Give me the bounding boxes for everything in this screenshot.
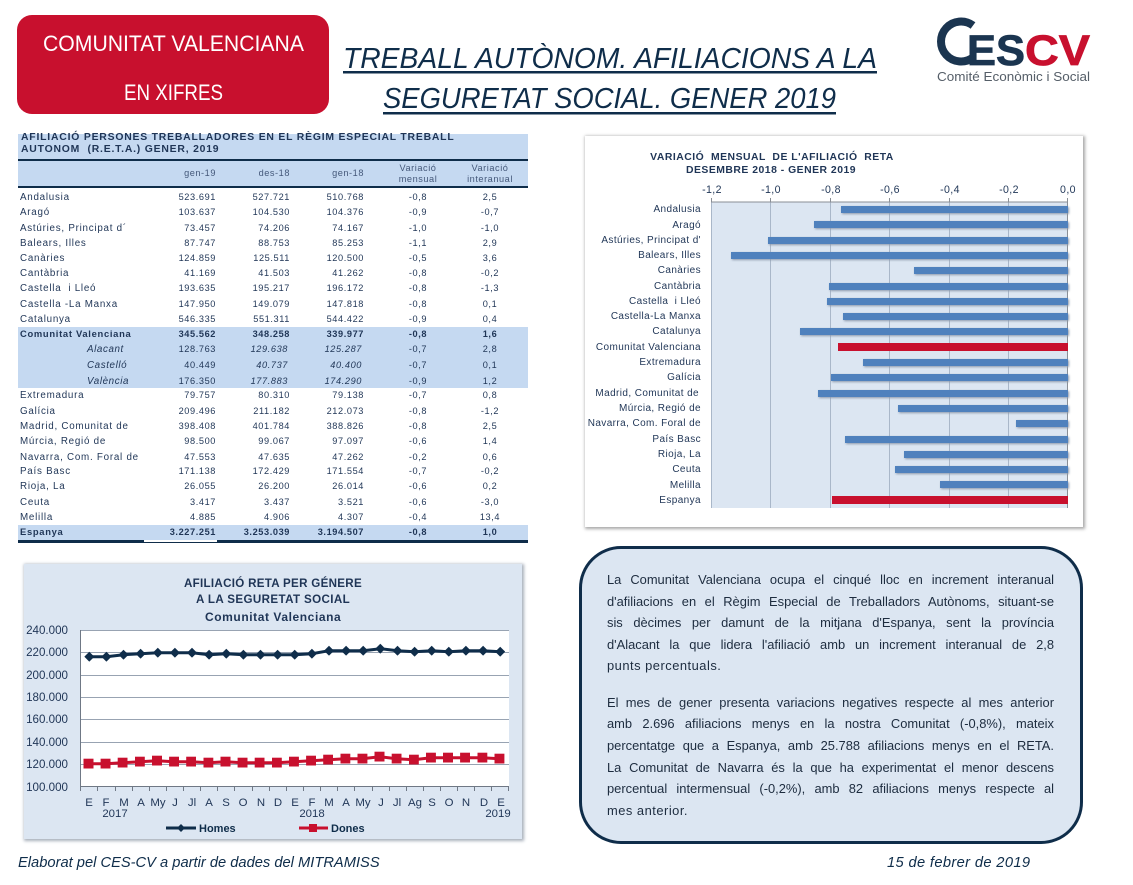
title: TREBALL AUTÒNOM. AFILIACIONS A LA <box>343 42 877 75</box>
table rows: 401.784 <box>253 421 290 431</box>
table rows: -1,0 <box>409 223 427 233</box>
table rows: 193.635 <box>179 283 216 293</box>
bars <box>731 206 1068 488</box>
y axis labels: 220.000 <box>26 646 68 659</box>
table rows: -0,8 <box>409 406 427 416</box>
table heading: AFILIACIÓ PERSONES TREBALLADORES EN EL RÈGIM ESPECIAL TREBALL <box>21 132 454 143</box>
table rows: 41.169 <box>184 268 216 278</box>
x axis labels: -0,4 <box>940 184 960 196</box>
table rows: 345.562 <box>179 329 216 339</box>
table rows: 3.417 <box>190 497 216 507</box>
region labels: Navarra, Com. Foral de <box>588 418 701 429</box>
table rows: 398.408 <box>179 421 216 431</box>
table rows: 147.950 <box>179 299 216 309</box>
table rows: 527.721 <box>253 192 290 202</box>
legend: Dones <box>331 823 365 835</box>
x axis labels: M <box>119 797 129 809</box>
y axis labels: 240.000 <box>26 624 68 637</box>
table rows: 88.753 <box>258 238 290 248</box>
paragraph 2: percentatge que a Espanya, amb 25.788 afiliacions menys en el RETA. <box>607 738 1054 753</box>
x axis labels: F <box>103 797 110 809</box>
table rows: 3.194.507 <box>318 527 364 537</box>
table rows: 2,5 <box>483 192 497 202</box>
table rows: Múrcia, Regió de <box>20 436 106 447</box>
table rows: -0,7 <box>409 466 427 476</box>
header badge: Comunitat Valenciana en xifres: COMUNITAT VALENCIANA <box>43 31 304 56</box>
table rows: 2,9 <box>483 238 497 248</box>
x axis labels: A <box>205 797 213 809</box>
table rows: -0,9 <box>409 376 427 386</box>
table rows: 74.167 <box>332 223 364 233</box>
paragraph 2 <box>607 695 1054 818</box>
line: Dones <box>88 757 499 764</box>
region labels: Madrid, Comunitat de <box>595 388 699 399</box>
table rows: 510.768 <box>327 192 364 202</box>
footer: date: 15 de febrer de 2019 <box>887 855 1030 871</box>
table rows: Andalusia <box>20 192 70 203</box>
table rows: 348.258 <box>253 329 290 339</box>
region labels: Comunitat Valenciana <box>596 342 701 353</box>
table rows: Espanya <box>20 526 63 537</box>
table rows: 98.500 <box>184 436 216 446</box>
region labels: Balears, Illes <box>638 250 701 261</box>
table rows: 26.055 <box>184 481 216 491</box>
table rows: 120.500 <box>327 253 364 263</box>
table rows: 41.262 <box>332 268 364 278</box>
table rows: -0,2 <box>409 452 427 462</box>
table rows: 177.883 <box>251 376 288 386</box>
table rows: Balears, Illes <box>20 238 87 249</box>
table rows: 125.287 <box>325 344 362 354</box>
chart title <box>184 577 362 624</box>
title <box>343 42 877 115</box>
title: SEGURETAT SOCIAL. GENER 2019 <box>383 83 836 115</box>
table rows: 1,4 <box>483 436 497 446</box>
table rows: 80.310 <box>258 390 290 400</box>
y axis labels: 120.000 <box>26 758 68 771</box>
x axis labels: -0,8 <box>821 184 841 196</box>
table rows: -0,2 <box>481 268 499 278</box>
table rows: 339.977 <box>327 329 364 339</box>
x axis labels <box>85 797 511 820</box>
table rows: -0,5 <box>409 253 427 263</box>
table column headers: gen-19 <box>184 168 216 178</box>
table rows: Canàries <box>20 253 65 264</box>
table rows: 174.290 <box>325 376 362 386</box>
table rows: 546.335 <box>179 314 216 324</box>
panel: monthly variation bar chart <box>585 136 1083 527</box>
table rows: 544.422 <box>327 314 364 324</box>
paragraph 1: d'Alacant la que lidera l'afiliació amb un increment interanual de 2,8 <box>607 637 1054 652</box>
region labels: Castella i Lleó <box>629 296 701 307</box>
table rows: 104.530 <box>253 207 290 217</box>
table rows: -1,2 <box>481 406 499 416</box>
table rows: 74.206 <box>258 223 290 233</box>
table rows: Rioja, La <box>20 481 65 492</box>
table rows: 147.818 <box>327 299 364 309</box>
table rows: Astúries, Principat d´ <box>20 223 127 234</box>
table rows: -0,2 <box>481 466 499 476</box>
table rows: 97.097 <box>332 436 364 446</box>
table rows: -1,3 <box>481 283 499 293</box>
x axis labels: S <box>428 797 436 809</box>
x axis labels: E <box>497 797 505 809</box>
table rows: 4.307 <box>338 512 364 522</box>
table rows: 523.691 <box>179 192 216 202</box>
table rows: 3.227.251 <box>170 527 216 537</box>
region labels: Canàries <box>658 265 701 276</box>
paragraph 1 <box>607 572 1054 673</box>
table rows: Ceuta <box>20 497 50 508</box>
highlighted bars: Comunitat Valenciana and Espanya <box>832 343 1068 504</box>
table rows: 0,8 <box>483 390 497 400</box>
paragraph 1: sis dècimes per damunt de la mitjana d'Espanya, sent la província <box>607 615 1054 630</box>
y axis labels: 200.000 <box>26 669 68 682</box>
chart title: Comunitat Valenciana <box>205 610 341 624</box>
region labels: Catalunya <box>652 326 701 337</box>
x axis labels: O <box>445 797 454 809</box>
x axis labels: Jl <box>188 797 196 809</box>
table rows: 79.138 <box>332 390 364 400</box>
table rows: 47.262 <box>332 452 364 462</box>
x axis labels: 2019 <box>485 808 511 820</box>
table column headers: gen-18 <box>332 168 364 178</box>
table column headers: des-18 <box>259 168 290 178</box>
table rows: Navarra, Com. Foral de <box>20 452 139 463</box>
table rows: 99.067 <box>258 436 290 446</box>
table rows: -0,8 <box>409 527 427 537</box>
table rows: 128.763 <box>179 344 216 354</box>
table rows: -0,8 <box>409 192 427 202</box>
paragraph 2: La Comunitat de Navarra és la que ha experimentat el menor descens <box>607 760 1054 775</box>
table rows: 388.826 <box>327 421 364 431</box>
region labels: Rioja, La <box>658 449 701 460</box>
highlighted band: Espanya <box>18 525 528 540</box>
panel: commentary text box <box>579 546 1083 844</box>
table rows: 149.079 <box>253 299 290 309</box>
x axis labels: -1,2 <box>702 184 722 196</box>
table heading <box>18 134 528 159</box>
table rows: -0,8 <box>409 299 427 309</box>
x axis labels: Jl <box>393 797 401 809</box>
footer: source: Elaborat pel CES-CV a partir de dades del MITRAMISS <box>18 855 380 871</box>
x axis labels: My <box>355 797 371 809</box>
region labels: Múrcia, Regió de <box>619 403 701 414</box>
x axis labels: E <box>291 797 299 809</box>
table rows: 47.635 <box>258 452 290 462</box>
table rows: -0,7 <box>409 344 427 354</box>
y axis labels: 140.000 <box>26 736 68 749</box>
table rows: 87.747 <box>184 238 216 248</box>
x axis labels: 0,0 <box>1060 184 1076 196</box>
x axis labels: N <box>257 797 265 809</box>
table rows: Cantàbria <box>20 268 69 279</box>
chart title: DESEMBRE 2018 - GENER 2019 <box>686 165 856 176</box>
x axis labels: S <box>222 797 230 809</box>
table rows: 0,2 <box>483 481 497 491</box>
table rows: -0,6 <box>409 436 427 446</box>
logo: CES-CV <box>937 18 1090 84</box>
paragraph 2: El mes de gener presenta variacions negatives respecte al mes anterior <box>607 695 1054 710</box>
paragraph 1: punts percentuals. <box>607 658 721 673</box>
table rows: 209.496 <box>179 406 216 416</box>
x axis labels: N <box>462 797 470 809</box>
table rows: Castella i Lleó <box>20 283 96 294</box>
region labels: Cantàbria <box>654 281 701 292</box>
x axis labels: O <box>239 797 248 809</box>
x axis labels: D <box>480 797 488 809</box>
table rows: Comunitat Valenciana <box>20 328 131 339</box>
chart title: VARIACIÓ MENSUAL DE L'AFILIACIÓ RETA <box>650 150 894 163</box>
table rows: 104.376 <box>327 207 364 217</box>
table rows: 3.521 <box>338 497 364 507</box>
region labels: Andalusia <box>653 204 701 215</box>
x axis labels: F <box>309 797 316 809</box>
x axis labels: -0,6 <box>880 184 900 196</box>
table rows: 172.429 <box>253 466 290 476</box>
table rows: -0,8 <box>409 329 427 339</box>
table rows: 3.253.039 <box>244 527 290 537</box>
table rows: -0,8 <box>409 283 427 293</box>
table rows: -0,4 <box>409 512 427 522</box>
table rows: -3,0 <box>481 497 499 507</box>
table column headers: interanual <box>467 174 513 184</box>
table rows: Castelló <box>87 360 127 371</box>
chart title: AFILIACIÓ RETA PER GÉNERE <box>184 577 362 590</box>
paragraph 2: amb 2.696 afiliacions menys en la nostra Comunitat (-0,8%), mateix <box>607 716 1054 731</box>
table rows: 40.400 <box>330 360 362 370</box>
table rows: 0,1 <box>483 299 497 309</box>
table rows: 2,8 <box>483 344 497 354</box>
paragraph 1: d'afiliacions en el Règim Especial de Treballadors Autònoms, situant-se <box>607 594 1054 609</box>
region labels: Melilla <box>670 480 701 491</box>
logo: CES-CV: ES <box>967 27 1025 75</box>
region labels: País Basc <box>652 434 701 445</box>
table rows: Castella -La Manxa <box>20 299 118 310</box>
x axis labels: -0,2 <box>999 184 1019 196</box>
table rows: 40.449 <box>184 360 216 370</box>
region labels: Extremadura <box>639 357 701 368</box>
table rows: -1,0 <box>481 223 499 233</box>
table rows: Aragó <box>20 207 50 218</box>
table column headers <box>18 161 528 186</box>
table rows: 3,6 <box>483 253 497 263</box>
region labels: Castella-La Manxa <box>611 311 701 322</box>
region labels: Aragó <box>672 220 701 231</box>
x axis labels: M <box>324 797 334 809</box>
table rows: 26.014 <box>332 481 364 491</box>
x axis labels: D <box>274 797 282 809</box>
logo: CES-CV: CV <box>1025 27 1090 75</box>
table rows: 40.737 <box>256 360 288 370</box>
table rows: 4.906 <box>264 512 290 522</box>
table rows: 47.553 <box>184 452 216 462</box>
table rows: 85.253 <box>332 238 364 248</box>
paragraph 1: La Comunitat Valenciana ocupa el cinqué lloc en increment interanual <box>607 572 1054 587</box>
table rows: 211.182 <box>253 406 290 416</box>
table column headers: Variació <box>472 163 508 173</box>
table rows: 26.200 <box>258 481 290 491</box>
table rows: -0,6 <box>409 497 427 507</box>
table rows: 551.311 <box>253 314 290 324</box>
chart title <box>650 150 894 176</box>
region labels: Astúries, Principat d' <box>601 235 701 246</box>
table rows: 13,4 <box>480 512 500 522</box>
table rows: Galícia <box>20 406 56 417</box>
table rows: Melilla <box>20 512 53 523</box>
table rows: -0,6 <box>409 481 427 491</box>
table rows: València <box>87 376 129 387</box>
x axis labels: A <box>137 797 145 809</box>
table rows: 0,4 <box>483 314 497 324</box>
region labels: Ceuta <box>672 464 701 475</box>
region labels: Espanya <box>659 495 701 506</box>
table rows: 73.457 <box>184 223 216 233</box>
table rows: 171.138 <box>179 466 216 476</box>
table rows: 103.637 <box>179 207 216 217</box>
table rows: 4.885 <box>190 512 216 522</box>
table rows: 124.859 <box>179 253 216 263</box>
x axis labels: J <box>172 797 178 809</box>
y axis labels <box>26 624 68 794</box>
table rows: -0,8 <box>409 421 427 431</box>
line: Homes <box>89 649 500 657</box>
table rows: 212.073 <box>327 406 364 416</box>
table rows: 2,5 <box>483 421 497 431</box>
region labels <box>588 204 701 506</box>
header badge: Comunitat Valenciana en xifres: EN XIFRES <box>124 80 223 105</box>
y axis labels: 180.000 <box>26 691 68 704</box>
paragraph 2: mes anterior. <box>607 803 688 818</box>
x axis labels: -1,0 <box>761 184 781 196</box>
table rows: 125.511 <box>253 253 290 263</box>
panel: gender line chart <box>24 564 522 839</box>
table rows: 79.757 <box>184 390 216 400</box>
table rows: 1,0 <box>483 527 497 537</box>
chart title: A LA SEGURETAT SOCIAL <box>196 593 350 606</box>
x axis labels: A <box>342 797 350 809</box>
table rows: Catalunya <box>20 314 71 325</box>
table rows: -0,7 <box>409 390 427 400</box>
table rows: 171.554 <box>327 466 364 476</box>
x axis labels <box>702 184 1076 196</box>
paragraph 2: percentual intermensual (-0,2%), amb 82 afiliacions menys respecte al <box>607 781 1054 796</box>
table rows: 1,6 <box>483 329 497 339</box>
table column headers: mensual <box>399 174 437 184</box>
header badge: Comunitat Valenciana en xifres <box>17 15 329 114</box>
x axis labels: Ag <box>408 797 422 809</box>
table heading: AUTONOM (R.E.T.A.) GENER, 2019 <box>21 144 219 155</box>
x axis labels: 2018 <box>299 808 325 820</box>
table rows: -0,9 <box>409 314 427 324</box>
y axis labels: 100.000 <box>26 781 68 794</box>
highlighted band: Comunitat Valenciana <box>18 327 528 388</box>
table rows: Extremadura <box>20 390 84 401</box>
region labels: Galícia <box>667 372 701 383</box>
table rows: Madrid, Comunitat de <box>20 421 129 432</box>
table rows: 3.437 <box>264 497 290 507</box>
table rows: 196.172 <box>327 283 364 293</box>
table rows: 129.638 <box>251 344 288 354</box>
x axis labels: My <box>150 797 166 809</box>
table rows: 1,2 <box>483 376 497 386</box>
x axis labels: J <box>378 797 384 809</box>
table rows: -0,9 <box>409 207 427 217</box>
table rows: -0,7 <box>409 360 427 370</box>
panel: data table <box>18 130 528 543</box>
table rows: -0,8 <box>409 268 427 278</box>
table column headers: Variació <box>400 163 436 173</box>
table rows: 0,6 <box>483 452 497 462</box>
logo: CES-CV: Comité Econòmic i Social <box>937 70 1090 84</box>
y axis labels: 160.000 <box>26 713 68 726</box>
table rows: País Basc <box>20 466 71 477</box>
legend <box>166 823 365 835</box>
table rows: 195.217 <box>253 283 290 293</box>
table rows: Alacant <box>87 344 124 355</box>
legend: Homes <box>199 823 236 835</box>
table rows: 41.503 <box>258 268 290 278</box>
x axis labels: E <box>85 797 93 809</box>
table rows: -1,1 <box>409 238 427 248</box>
x axis labels: 2017 <box>102 808 128 820</box>
table rows: 0,1 <box>483 360 497 370</box>
table rows <box>20 192 500 537</box>
table rows: 176.350 <box>179 376 216 386</box>
table rows: -0,7 <box>481 207 499 217</box>
